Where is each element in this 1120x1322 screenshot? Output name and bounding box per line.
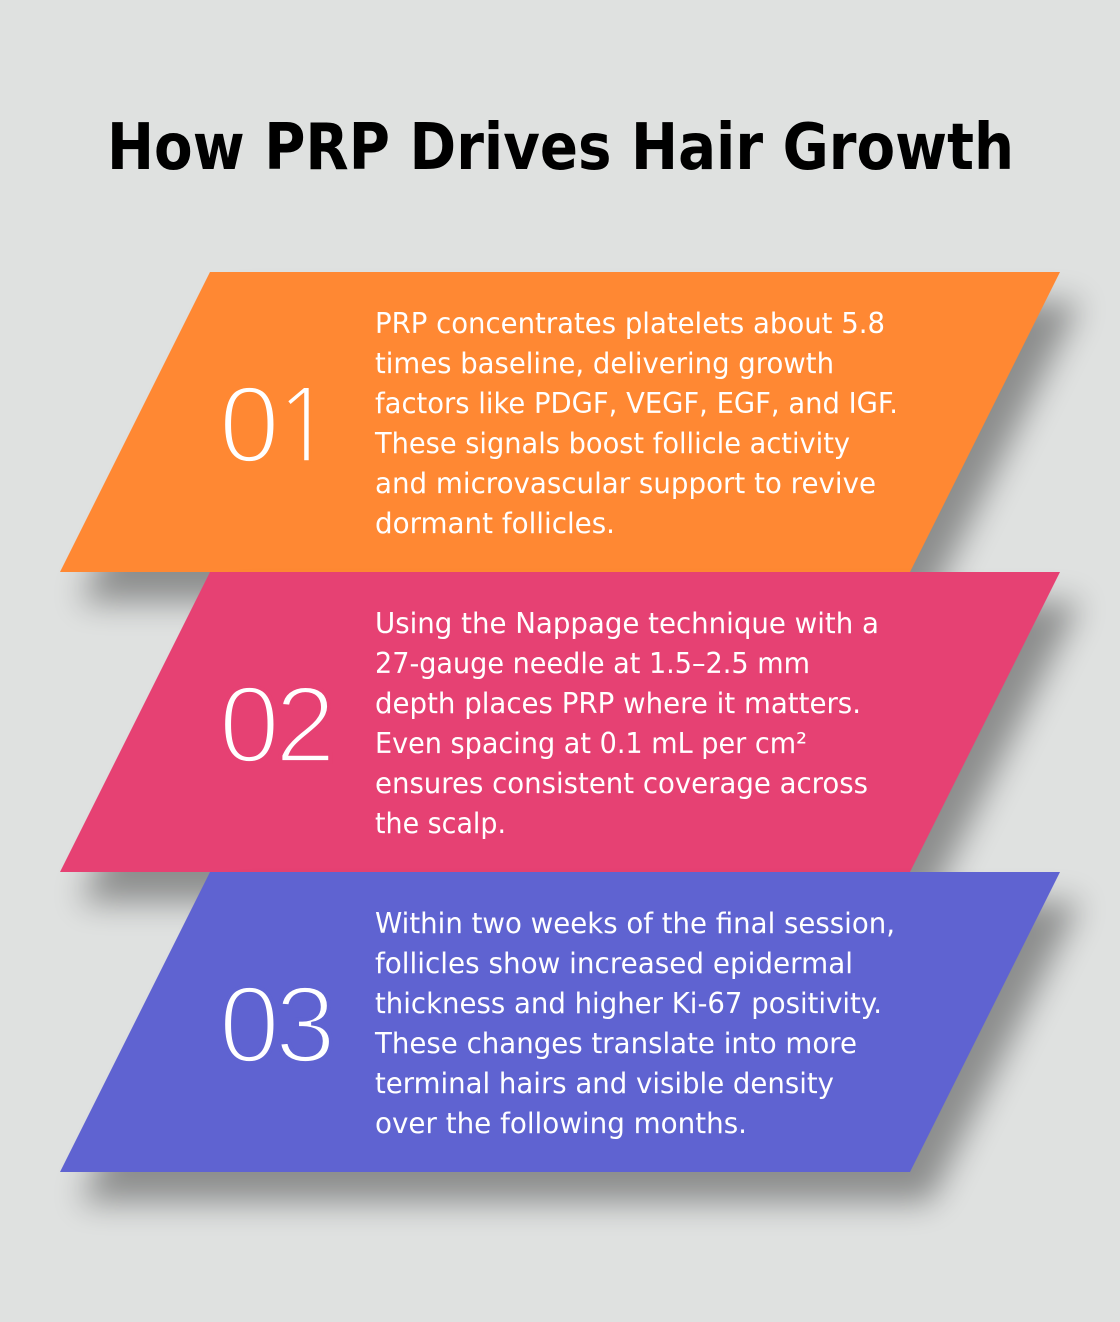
text block 03: Within two weeks of the final session, xyxy=(375,906,895,940)
text block 02 xyxy=(375,606,879,840)
text block 03: thickness and higher Ki-67 positivity. xyxy=(375,986,882,1020)
text block 02: 27-gauge needle at 1.5–2.5 mm xyxy=(375,646,810,680)
number 02: 02 xyxy=(219,664,336,786)
number 01 xyxy=(219,364,334,486)
text block 03: follicles show increased epidermal xyxy=(375,946,853,980)
text block 02: Using the Nappage technique with a xyxy=(375,606,879,640)
number 01: 1 xyxy=(273,376,334,476)
text block 02: the scalp. xyxy=(375,806,506,840)
text block 01: PRP concentrates platelets about 5.8 xyxy=(375,306,885,340)
text block 02: Even spacing at 0.1 mL per cm² xyxy=(375,726,807,760)
panel: step 03 xyxy=(60,872,1080,1202)
number 03: 03 xyxy=(219,964,336,1086)
text block 01 xyxy=(374,306,898,540)
text block 01: and microvascular support to revive xyxy=(375,466,876,500)
text block 02: depth places PRP where it matters. xyxy=(375,686,861,720)
text block 02: ensures consistent coverage across xyxy=(375,766,868,800)
text block 03: over the following months. xyxy=(375,1106,747,1140)
text block 03: terminal hairs and visible density xyxy=(375,1066,834,1100)
panel: step 01 xyxy=(60,272,1080,602)
text block 01: dormant follicles. xyxy=(375,506,615,540)
text block 03: These changes translate into more xyxy=(374,1026,857,1060)
text block 01: times baseline, delivering growth xyxy=(375,346,834,380)
number 01: 0 xyxy=(219,364,280,486)
text block 01: These signals boost follicle activity xyxy=(374,426,850,460)
title: How PRP Drives Hair Growth xyxy=(107,111,1014,185)
text block 01: factors like PDGF, VEGF, EGF, and IGF. xyxy=(375,386,898,420)
panel: step 02 xyxy=(60,572,1080,902)
text block 03 xyxy=(374,906,895,1140)
